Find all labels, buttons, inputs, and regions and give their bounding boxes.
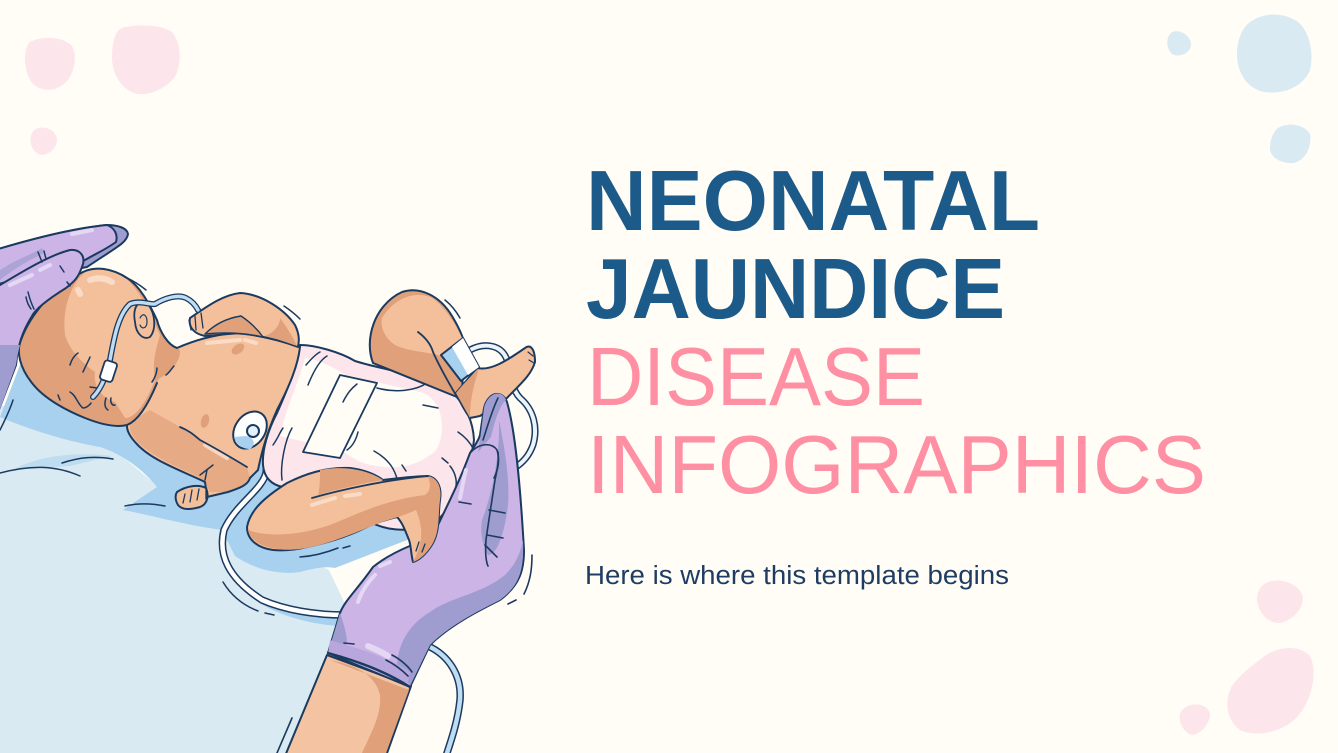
- diaper: [263, 345, 474, 530]
- monitor tube: [222, 434, 460, 753]
- nasal oxygen tube: [93, 296, 198, 397]
- title line: JAUNDICE: JAUNDICE: [586, 242, 1005, 337]
- baby head: [19, 269, 180, 426]
- title line: INFOGRAPHICS: INFOGRAPHICS: [587, 418, 1206, 511]
- gloved left hand: [0, 225, 128, 420]
- baby hand lower: [176, 486, 208, 509]
- gloved right hand with arm: [277, 393, 532, 753]
- nasal tube clip: [99, 360, 118, 383]
- decorative pink blobs top left: [25, 25, 180, 155]
- glove body: [328, 394, 524, 687]
- illustration: baby held by gloved hands: [0, 225, 535, 753]
- chest sensor: [226, 405, 274, 455]
- decorative blue blobs top right: [1167, 14, 1312, 163]
- baby raised arm: [189, 293, 300, 347]
- pale blue mattress: [0, 405, 346, 753]
- near leg: [247, 468, 440, 562]
- title line: NEONATAL: NEONATAL: [586, 154, 1040, 249]
- glove cuff: [328, 640, 410, 686]
- title: [586, 154, 1206, 511]
- subtitle: Here is where this template begins: [585, 562, 1009, 590]
- foot tube: [470, 346, 535, 467]
- decorative pink blobs bottom right: [1180, 580, 1314, 735]
- glove highlights: [358, 470, 466, 656]
- baby torso and lower arm: [127, 333, 300, 497]
- bedding wrinkle lines: [0, 400, 350, 615]
- forearm: [285, 655, 411, 753]
- blue sheet shadow: [0, 365, 420, 626]
- glove shading: [331, 393, 523, 686]
- glove creases: [277, 398, 532, 753]
- far leg: [370, 290, 535, 418]
- title line: DISEASE: DISEASE: [587, 330, 925, 423]
